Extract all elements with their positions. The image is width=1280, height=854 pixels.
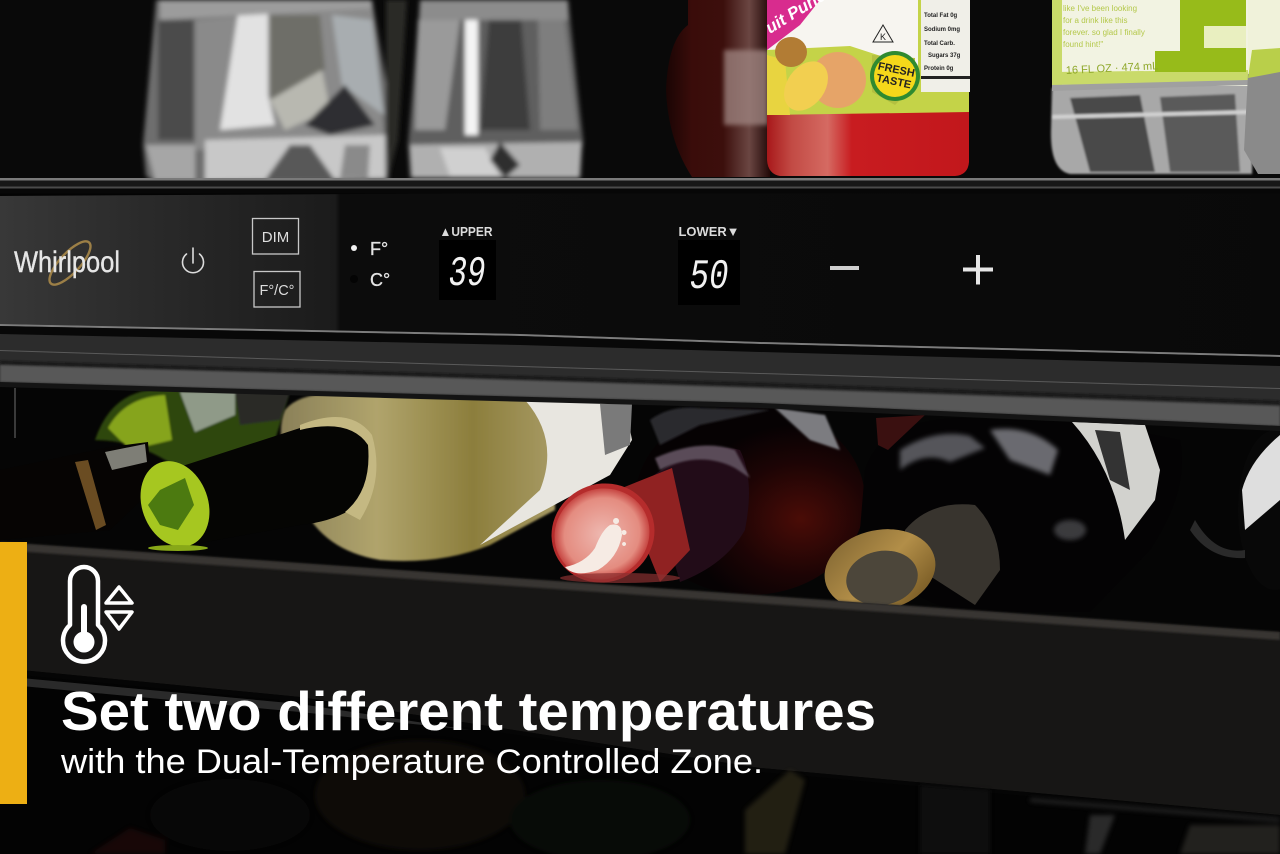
upper shelf: sparkling water bottles: found hint!" [1063, 40, 1103, 49]
lower compartment: right bottle [1190, 430, 1280, 590]
upper shelf: juice bottles: Protein 0g [924, 66, 954, 72]
upper shelf: sparkling water bottles: 16 FL OZ · 474 mL [1066, 60, 1159, 77]
indicator: C°: C° [370, 270, 390, 290]
upper shelf: juice bottles: Sodium 0mg [924, 27, 960, 33]
button: minus [830, 266, 859, 270]
upper temperature display: ▲UPPER [440, 224, 493, 239]
control panel [0, 188, 1280, 355]
button: F°/C°: F°/C° [260, 282, 294, 299]
lower compartment: green bottle [0, 390, 290, 540]
lower compartment: interior [0, 375, 1280, 640]
heading: Set two different temperatures [61, 680, 876, 742]
upper shelf: water bottles [143, 0, 583, 183]
trim band [0, 324, 1280, 431]
indicator: C° [350, 270, 390, 290]
upper shelf: sparkling water bottles: forever. so glad I finally [1063, 28, 1145, 37]
lower compartment: red wine bottle [535, 405, 865, 599]
subheading: with the Dual-Temperature Controlled Zone. [60, 743, 763, 781]
upper shelf: sparkling water bottles: for a drink like this [1063, 16, 1127, 25]
button: plus [963, 255, 993, 284]
button: DIM [252, 218, 298, 254]
upper shelf: sparkling water bottles: like I've been looking [1063, 4, 1137, 13]
upper temperature display: 39 [445, 250, 489, 298]
upper shelf: juice bottles [666, 0, 970, 177]
icon: thermometer with up/down arrows [63, 567, 132, 662]
indicator: F° [351, 239, 388, 259]
upper shelf: sparkling water bottles [1051, 0, 1280, 174]
button: DIM: DIM [262, 229, 289, 246]
lower temperature display [678, 224, 740, 305]
button: F°/C° [254, 272, 300, 307]
logo: Whirlpool: Whirlpool [14, 246, 120, 279]
lower front rail [0, 542, 1280, 819]
upper temperature display [439, 224, 496, 300]
upper shelf: juice bottles: K [880, 32, 886, 42]
upper shelf: juice bottles: TASTE [875, 72, 912, 91]
lower temperature display: LOWER▼ [678, 224, 740, 239]
upper shelf: juice bottles: FRESH [877, 60, 916, 80]
upper shelf rail [0, 178, 1280, 188]
logo: Whirlpool [14, 236, 120, 290]
faint bottles at bottom [90, 740, 1280, 854]
icon: footprint on cap [565, 518, 627, 573]
icon: power [182, 248, 204, 273]
lower temperature display: 50 [686, 253, 732, 301]
indicator: F°: F° [370, 239, 388, 259]
lower compartment: white wine bottle [129, 394, 632, 561]
upper shelf: juice bottles: Total Carb. [924, 41, 955, 47]
upper shelf: juice bottles: Sugars 37g [928, 53, 961, 59]
lower compartment: dark wine bottle [817, 415, 1182, 621]
upper shelf: juice bottles: Total Fat 0g [924, 13, 958, 19]
yellow accent bar [0, 542, 27, 804]
